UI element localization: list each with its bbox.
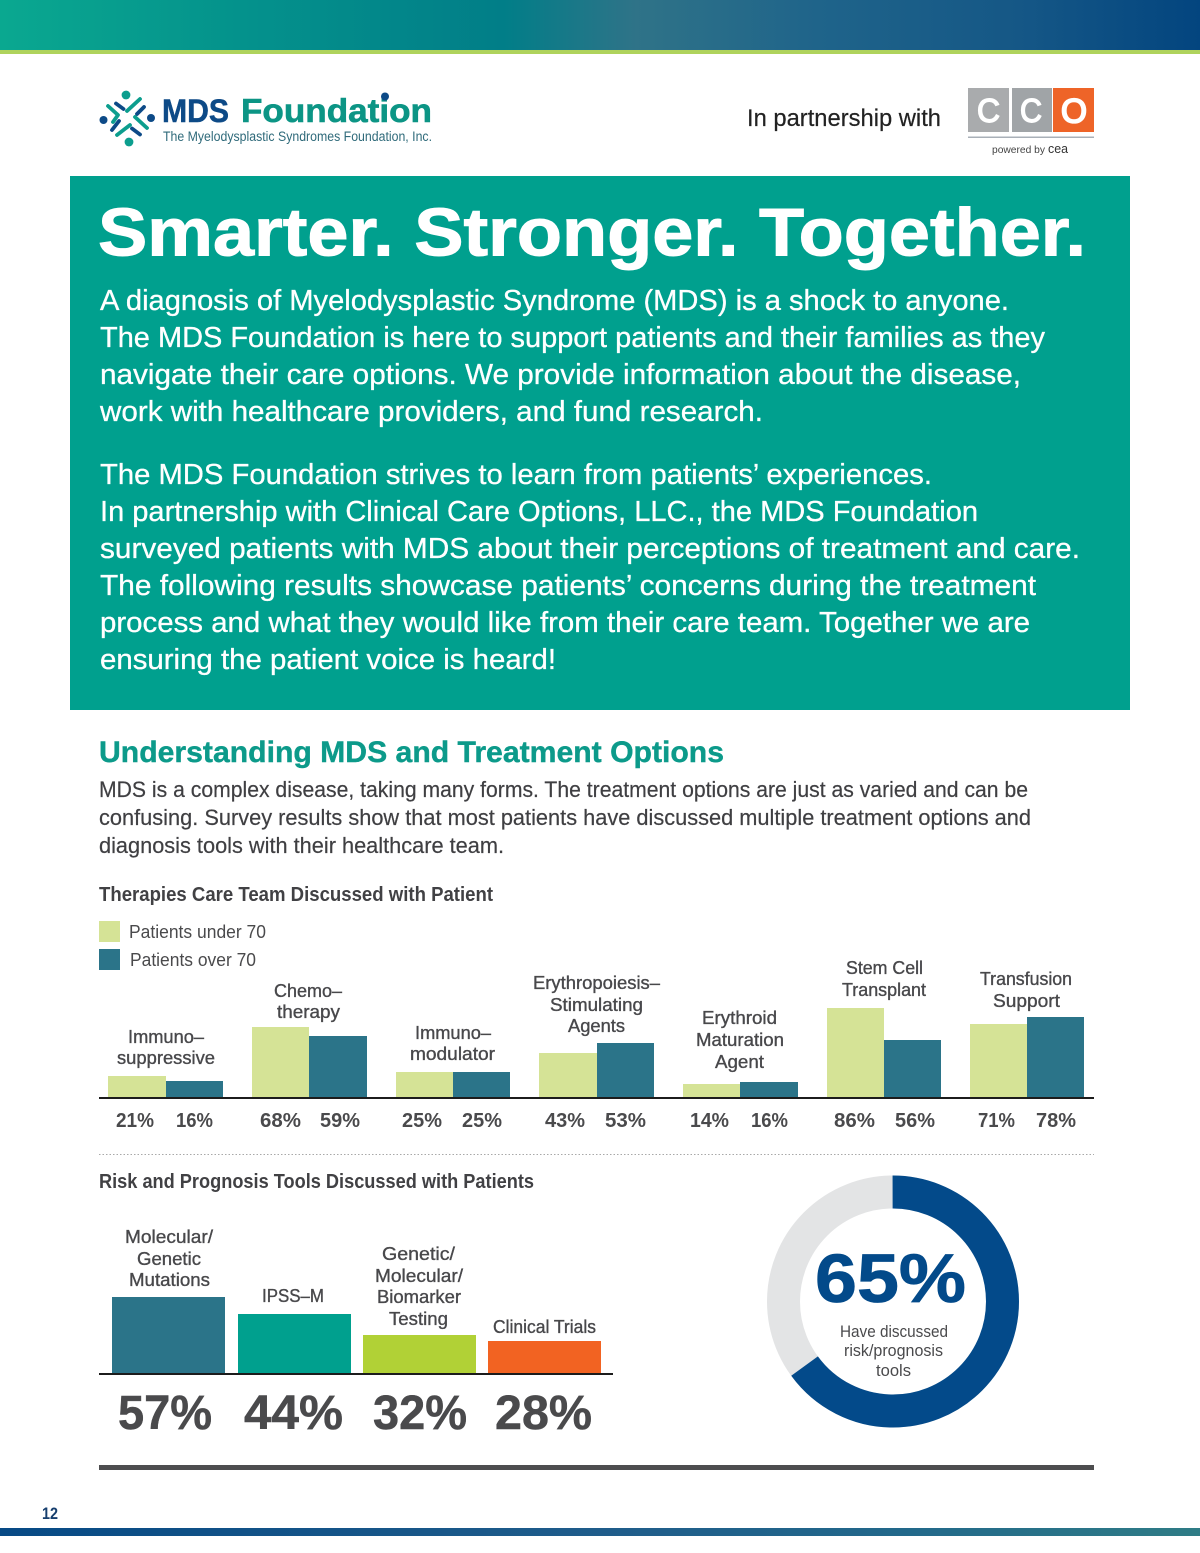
label: stem cell transplant: Stem Cell: [846, 958, 923, 978]
bar chart: therapies: [99, 958, 1094, 1132]
label: erythropoiesis-stimulating agents: Stimulating: [550, 995, 643, 1015]
label: IPSS-M: IPSS–M: [262, 1286, 324, 1306]
bars: transfusion support: [970, 1017, 1084, 1098]
label: transfusion support: Support: [993, 991, 1060, 1011]
large percentages: 44%: [244, 1387, 343, 1440]
percentages: 25%: [402, 1110, 442, 1132]
label: transfusion support: Transfusion: [980, 969, 1072, 989]
percentages: 78%: [1036, 1110, 1076, 1132]
label: immunomodulator: [410, 1023, 495, 1064]
CCO logo: cea: [1048, 141, 1069, 156]
label: biomarker testing: Testing: [389, 1309, 448, 1329]
bar: biomarker testing: [363, 1335, 476, 1374]
bars: immunosuppressive: [108, 1076, 223, 1098]
label: stem cell transplant: [842, 958, 926, 1000]
label: clinical trials: Clinical Trials: [493, 1317, 596, 1337]
heading: understanding MDS: Understanding MDS and Treatment Options: [99, 736, 724, 769]
legend: [99, 921, 266, 970]
legend: Patients under 70: [129, 922, 266, 942]
title: Smarter. Stronger. Together.: [98, 194, 1086, 270]
bars: erythroid maturation agent: [683, 1082, 798, 1098]
MDS Foundation logo: Foundation: [241, 92, 432, 129]
donut caption: tools: [876, 1362, 911, 1380]
bars: erythropoiesis-stimulating agents: [539, 1043, 654, 1098]
label: immunosuppressive: [117, 1027, 215, 1068]
text block: intro paragraph 2: In partnership with Clinical Care Options, LLC., the MDS Foundation: [100, 496, 978, 528]
donut caption: risk/prognosis: [844, 1342, 943, 1360]
text block: intro paragraph 1: [99, 285, 1045, 428]
icon: people circle: [100, 91, 155, 146]
large percentages: [118, 1387, 592, 1440]
CCO logo: C: [1020, 92, 1042, 129]
CCO logo: C: [977, 92, 1000, 129]
label: erythroid maturation agent: Erythroid: [702, 1008, 777, 1028]
label: biomarker testing: [375, 1244, 463, 1329]
percentages: 59%: [320, 1110, 360, 1132]
bottom gradient band: [0, 1528, 1200, 1536]
donut value: 65%: [815, 1240, 966, 1317]
donut caption: Have discussed: [840, 1323, 948, 1341]
bars: chemotherapy: [252, 1027, 367, 1098]
label: chemotherapy: therapy: [277, 1002, 340, 1022]
heading: risk tools chart: Risk and Prognosis Tools Discussed with Patients: [99, 1171, 534, 1193]
percentages: 86%: [834, 1110, 875, 1132]
text block: section intro: MDS is a complex disease, taking many forms. The treatment options are just as varied and can be: [99, 777, 1028, 802]
text block: intro paragraph 2: [100, 459, 1080, 676]
percentages: 71%: [978, 1110, 1015, 1132]
bars: immunomodulator: [396, 1072, 510, 1098]
percentages: 16%: [176, 1110, 213, 1132]
heading: therapies chart: Therapies Care Team Discussed with Patient: [99, 884, 493, 906]
text block: intro paragraph 1: work with healthcare providers, and fund research.: [99, 396, 763, 428]
legend: Patients over 70: [130, 950, 256, 970]
panel: intro: [70, 176, 1130, 710]
text block: intro paragraph 1: The MDS Foundation is here to support patients and their families as they: [100, 322, 1045, 354]
label: erythropoiesis-stimulating agents: Agents: [568, 1016, 625, 1036]
large percentages: 32%: [373, 1387, 467, 1440]
label: molecular/genetic mutations: Genetic: [137, 1249, 201, 1269]
label: erythroid maturation agent: Maturation: [696, 1030, 784, 1050]
label: erythropoiesis-stimulating agents: Erythropoiesis–: [533, 973, 660, 993]
label: biomarker testing: Genetic/: [382, 1244, 455, 1264]
percentages: 21%: [116, 1110, 154, 1132]
percentages: 25%: [462, 1110, 502, 1132]
text block: intro paragraph 2: The following results showcase patients’ concerns during the treatment: [100, 570, 1036, 602]
text block: section intro: diagnosis tools with their healthcare team.: [99, 833, 504, 858]
label: immunomodulator: modulator: [410, 1044, 495, 1064]
percentages: 56%: [895, 1110, 935, 1132]
large percentages: 57%: [118, 1387, 212, 1440]
percentages: 68%: [260, 1110, 301, 1132]
bar: IPSS-M: [238, 1314, 351, 1374]
label: molecular/genetic mutations: [125, 1227, 213, 1290]
text block: intro paragraph 2: The MDS Foundation strives to learn from patients’ experiences.: [100, 459, 932, 491]
text block: intro paragraph 1: navigate their care options. We provide information about the disease,: [100, 359, 1021, 391]
bar chart: risk and prognosis tools: [99, 1227, 613, 1440]
label: stem cell transplant: Transplant: [842, 980, 926, 1000]
MDS Foundation logo: The Myelodysplastic Syndromes Foundation, Inc.: [163, 129, 432, 144]
percentages: 14%: [690, 1110, 729, 1132]
label: immunosuppressive: Immuno–: [128, 1027, 204, 1047]
text block: section intro: [99, 777, 1031, 858]
CCO logo: O: [1061, 92, 1087, 130]
large percentages: 28%: [495, 1387, 592, 1440]
label: molecular/genetic mutations: Molecular/: [125, 1227, 213, 1247]
label: transfusion support: [980, 969, 1072, 1011]
percentages: 43%: [545, 1110, 585, 1132]
page number: 12: [42, 1504, 58, 1523]
CCO logo: [968, 88, 1094, 156]
donut chart: 65%: [784, 1192, 1002, 1411]
label: molecular/genetic mutations: Mutations: [129, 1270, 210, 1290]
CCO logo: powered by: [992, 145, 1045, 156]
top gradient band: [0, 0, 1200, 54]
text block: section intro: confusing. Survey results show that most patients have discussed multiple treatment options and: [99, 805, 1031, 830]
label: erythroid maturation agent: [696, 1008, 784, 1072]
bar: molecular/genetic mutations: [112, 1297, 225, 1374]
bar: clinical trials: [488, 1341, 601, 1374]
label: biomarker testing: Molecular/: [375, 1266, 463, 1286]
text block: intro paragraph 1: A diagnosis of Myelodysplastic Syndrome (MDS) is a shock to anyone.: [100, 285, 1009, 317]
label: chemotherapy: [274, 981, 342, 1022]
logo wordmark: MDS: [162, 93, 229, 129]
donut caption: [840, 1323, 948, 1380]
label: biomarker testing: Biomarker: [377, 1287, 461, 1307]
bars: stem cell transplant: [827, 1008, 941, 1098]
percentages: 53%: [605, 1110, 646, 1132]
text block: intro paragraph 2: surveyed patients with MDS about their perceptions of treatment and care.: [100, 533, 1080, 565]
text block: intro paragraph 2: process and what they would like from their care team. Together we are: [100, 607, 1030, 639]
label: immunosuppressive: suppressive: [117, 1048, 215, 1068]
text block: intro paragraph 2: ensuring the patient voice is heard!: [100, 644, 556, 676]
partnership text: In partnership with: [747, 105, 941, 132]
label: erythroid maturation agent: Agent: [715, 1052, 764, 1072]
percentages: [116, 1110, 1076, 1132]
label: chemotherapy: Chemo–: [274, 981, 342, 1001]
label: immunomodulator: Immuno–: [415, 1023, 491, 1043]
label: erythropoiesis-stimulating agents: [533, 973, 660, 1036]
MDS Foundation logo: [100, 91, 432, 146]
percentages: 16%: [751, 1110, 788, 1132]
